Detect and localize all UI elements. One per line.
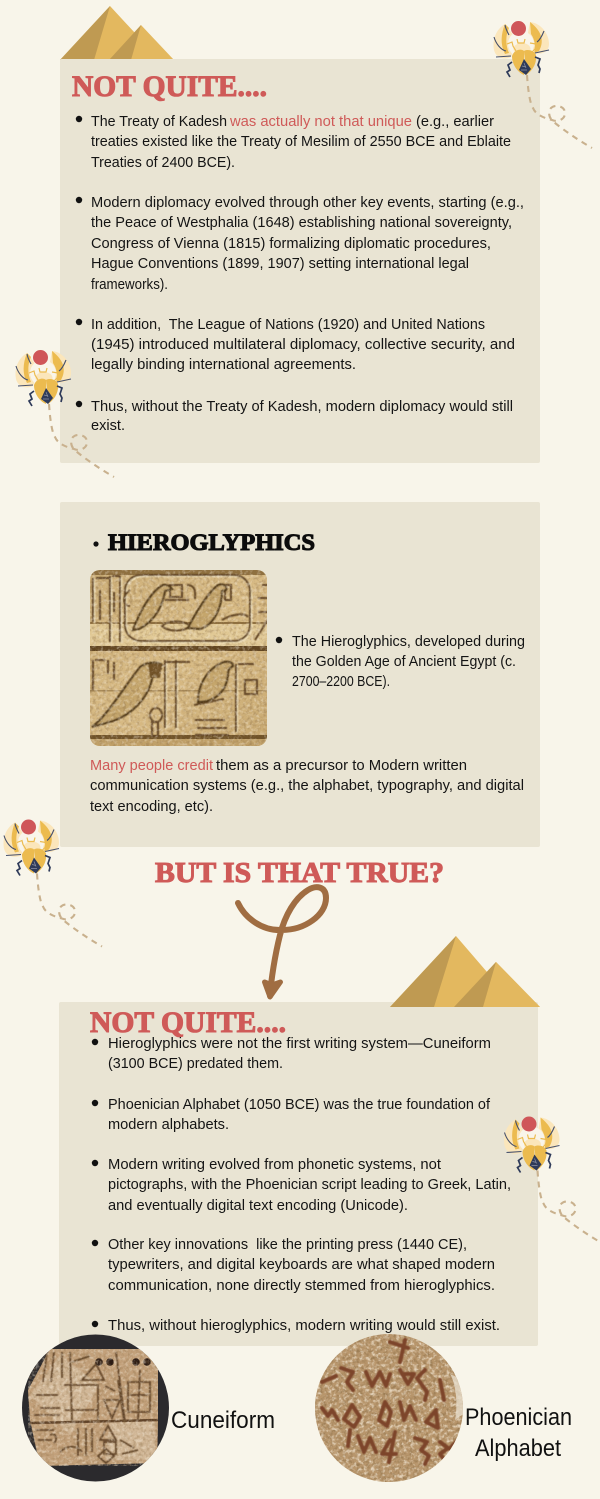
text block: Kadesh bullets: legally binding international agreements. xyxy=(91,356,356,373)
icon: scarab right lower xyxy=(504,1116,600,1244)
text block: Kadesh bullets: Hague Conventions (1899, 1907) setting international legal xyxy=(91,255,469,272)
text block: writing bullets: (3100 BCE) predated them. xyxy=(108,1055,283,1072)
icon: top pyramids xyxy=(60,6,174,60)
image: phoenician inscription xyxy=(315,1334,463,1482)
label: phoenician alphabet: Phoenician xyxy=(465,1404,572,1431)
arrow: looping brown arrow xyxy=(238,887,326,997)
text block: Kadesh bullets: frameworks). xyxy=(91,276,168,293)
icon: scarab left middle xyxy=(3,820,102,946)
text block: hieroglyphics bullet: The Hieroglyphics, developed during xyxy=(292,633,525,650)
text block: writing bullets: Hieroglyphics were not the first writing system—Cuneiform xyxy=(108,1035,491,1052)
image: cuneiform tablet xyxy=(20,1333,172,1485)
text block: Kadesh bullets: Treaties of 2400 BCE). xyxy=(91,154,235,171)
text block: writing bullets: pictographs, with the Phoenician script leading to Greek, Latin, xyxy=(108,1176,511,1193)
heading: hieroglyphics: HIEROGLYPHICS xyxy=(108,530,315,555)
heading: not quite: NOT QUITE.... xyxy=(90,1006,286,1039)
label: phoenician alphabet: Alphabet xyxy=(475,1435,561,1462)
heading: not quite: NOT QUITE.... xyxy=(72,70,267,103)
text block: Kadesh bullets: exist. xyxy=(91,417,125,434)
text block: many people credit: them as a precursor to Modern written xyxy=(216,757,467,774)
text block: Kadesh bullets: Modern diplomacy evolved through other key events, starting (e.g., xyxy=(91,194,524,211)
icon: scarab top right xyxy=(493,21,592,148)
text block: Kadesh bullets: treaties existed like the Treaty of Mesilim of 2550 BCE and Eblaite xyxy=(91,133,511,150)
text block: many people credit xyxy=(90,757,524,815)
text block: writing bullets: Modern writing evolved from phonetic systems, not xyxy=(108,1156,442,1173)
text block: writing bullets: and eventually digital text encoding (Unicode). xyxy=(108,1197,408,1214)
text block: Kadesh bullets xyxy=(76,113,524,434)
text block: Kadesh bullets: the Peace of Westphalia (1648) establishing national sovereignty, xyxy=(91,214,512,231)
panel: hieroglyphics xyxy=(60,502,540,847)
text block: writing bullets: Phoenician Alphabet (1050 BCE) was the true foundation of xyxy=(108,1096,491,1113)
text block: many people credit: Many people credit xyxy=(90,757,214,774)
text block: hieroglyphics bullet: the Golden Age of Ancient Egypt (c. xyxy=(292,653,516,670)
text block: Kadesh bullets: was actually not that unique xyxy=(229,113,412,130)
text block: Kadesh bullets: (1945) introduced multilateral diplomacy, collective security, and xyxy=(91,336,515,353)
image: carved hieroglyphs xyxy=(90,570,269,746)
text block: Kadesh bullets: Thus, without the Treaty of Kadesh, modern diplomacy would still xyxy=(91,398,513,415)
text block: Kadesh bullets: The Treaty of Kadesh xyxy=(91,113,227,130)
text block: many people credit: text encoding, etc). xyxy=(90,798,213,815)
text block: writing bullets: Thus, without hieroglyphics, modern writing would still exist. xyxy=(108,1317,500,1334)
text block: writing bullets: typewriters, and digital keyboards are what shaped modern xyxy=(108,1256,495,1273)
text block: hieroglyphics bullet xyxy=(276,633,525,690)
text block: Kadesh bullets: Congress of Vienna (1815) formalizing diplomatic procedures, xyxy=(91,235,491,252)
label: cuneiform: Cuneiform xyxy=(171,1407,275,1434)
text block: hieroglyphics bullet: 2700–2200 BCE). xyxy=(292,673,390,690)
panel: Treaty of Kadesh rebuttal xyxy=(60,59,540,463)
text block: many people credit: communication systems (e.g., the alphabet, typography, and digital xyxy=(90,777,524,794)
panel: hieroglyphics rebuttal xyxy=(59,1002,538,1346)
icon: scarab left upper xyxy=(15,350,114,477)
icon: lower pyramids xyxy=(390,936,540,1007)
text block: Kadesh bullets: In addition, The League of Nations (1920) and United Nations xyxy=(91,316,485,333)
heading: but is that true: BUT IS THAT TRUE? xyxy=(155,858,444,889)
text block: writing bullets xyxy=(92,1035,511,1334)
text block: writing bullets: communication, none directly stemmed from hieroglyphics. xyxy=(108,1277,495,1294)
text block: writing bullets: modern alphabets. xyxy=(108,1116,229,1133)
text block: Kadesh bullets: (e.g., earlier xyxy=(416,113,494,130)
text block: writing bullets: Other key innovations like the printing press (1440 CE), xyxy=(108,1236,467,1253)
label: phoenician alphabet xyxy=(465,1404,572,1462)
